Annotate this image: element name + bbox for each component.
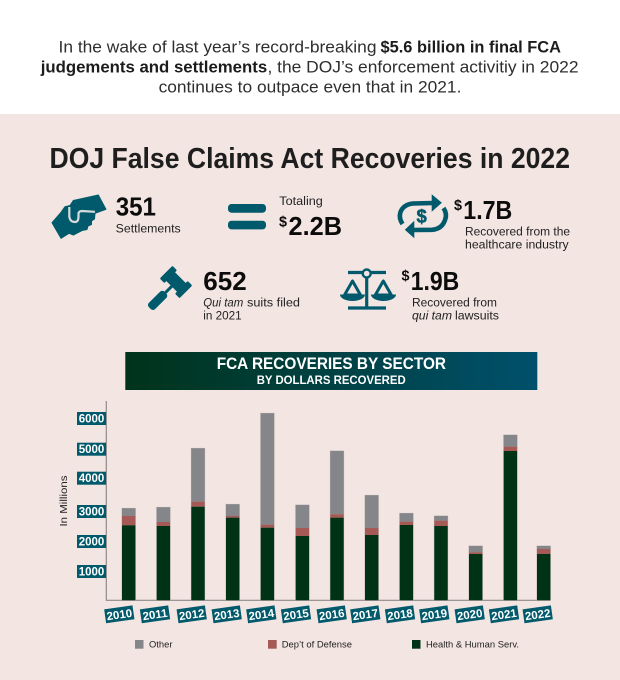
intro text: In the wake of last year’s record-breaking (58, 38, 377, 56)
x axis year labels: 2018 (387, 608, 414, 623)
amount: $ (402, 268, 410, 285)
y axis labels: 1000 (79, 566, 104, 578)
icon: scales (340, 270, 396, 308)
y axis labels: 3000 (79, 506, 104, 518)
label: Totaling (279, 194, 323, 208)
bar 2020 (469, 546, 482, 600)
bar 2021 (504, 435, 517, 600)
bar 2017 (365, 495, 378, 600)
x axis year labels: 2017 (352, 608, 379, 623)
chart banner: FCA RECOVERIES BY SECTOR (217, 354, 446, 373)
intro panel (0, 0, 620, 114)
description: in 2021 (203, 308, 242, 322)
axes (106, 401, 551, 600)
icon: handshake (52, 195, 106, 238)
description: Qui tam (203, 296, 243, 310)
bar 2013 (226, 504, 239, 600)
x axis year labels: 2019 (421, 608, 448, 623)
number: 652 (203, 266, 247, 296)
x axis year labels: 2013 (213, 608, 240, 623)
x axis year labels: 2021 (491, 608, 518, 623)
intro text (40, 38, 579, 97)
intro text: , the DOJ’s enforcement activitiy in 2022 (268, 58, 578, 77)
icon: equals (228, 204, 266, 229)
description (412, 296, 499, 322)
legend: other: Other (149, 640, 172, 651)
label: Settlements (116, 222, 181, 236)
bar 2015 (296, 505, 309, 600)
intro text: $5.6 billion in final FCA (380, 38, 561, 56)
stat: settlements (52, 192, 181, 238)
legend: department of defense: Dep’t of Defense (282, 640, 352, 651)
legend: other (135, 640, 172, 651)
amount: 2.2B (288, 211, 342, 241)
description: suits filed (247, 296, 300, 310)
bar 2011 (157, 507, 170, 600)
legend (135, 640, 519, 651)
description: healthcare industry (465, 237, 570, 251)
bars (122, 413, 550, 600)
x axis year labels: 2010 (106, 608, 133, 623)
icon: circular arrows with dollar: $ (417, 206, 428, 226)
stat: total (228, 194, 342, 241)
bar 2016 (330, 451, 344, 600)
intro text: judgements and settlements (40, 58, 267, 77)
amount: $ (279, 214, 288, 231)
title: DOJ False Claims Act Recoveries in 2022 (50, 143, 570, 175)
x axis year labels: 2014 (248, 608, 276, 623)
x axis year labels: 2022 (524, 608, 551, 623)
number: 351 (116, 192, 156, 222)
description (203, 296, 300, 322)
chart banner (125, 352, 537, 390)
amount: $ (454, 197, 463, 214)
icon: gavel (140, 266, 192, 318)
y axis labels: 2000 (79, 536, 104, 548)
amount: 1.9B (411, 266, 459, 296)
stat: healthcare (400, 194, 570, 251)
bar 2022 (537, 546, 550, 600)
y axis labels: 6000 (79, 414, 104, 426)
description: Recovered from (412, 296, 497, 310)
bar 2012 (191, 448, 205, 600)
bar chart (58, 401, 553, 623)
bar 2019 (434, 516, 448, 600)
bar 2010 (122, 508, 135, 600)
y axis labels (77, 412, 106, 578)
stat: qui tam suits (140, 266, 300, 322)
y axis title: In Millions (58, 476, 70, 526)
x axis year labels: 2011 (142, 608, 169, 623)
x axis year labels: 2016 (318, 608, 345, 623)
bar 2014 (261, 413, 274, 600)
x axis year labels: 2012 (178, 608, 205, 623)
y axis labels: 5000 (79, 444, 104, 456)
description: qui tam (412, 308, 452, 322)
y axis labels: 4000 (79, 473, 104, 485)
description: Recovered from the (465, 225, 570, 239)
icon: circular arrows with dollar (400, 194, 446, 238)
x axis year labels: 2015 (283, 608, 310, 623)
bar 2018 (400, 513, 413, 600)
x axis year labels: 2020 (456, 608, 483, 623)
intro text: continues to outpace even that in 2021. (159, 78, 461, 97)
chart banner: BY DOLLARS RECOVERED (257, 373, 406, 387)
legend: health and human services: Health & Human Serv. (426, 640, 519, 651)
stat: qui tam lawsuits (340, 266, 499, 322)
description (465, 225, 570, 251)
description: lawsuits (455, 308, 499, 322)
amount: 1.7B (463, 195, 512, 225)
x axis year labels (104, 605, 553, 623)
